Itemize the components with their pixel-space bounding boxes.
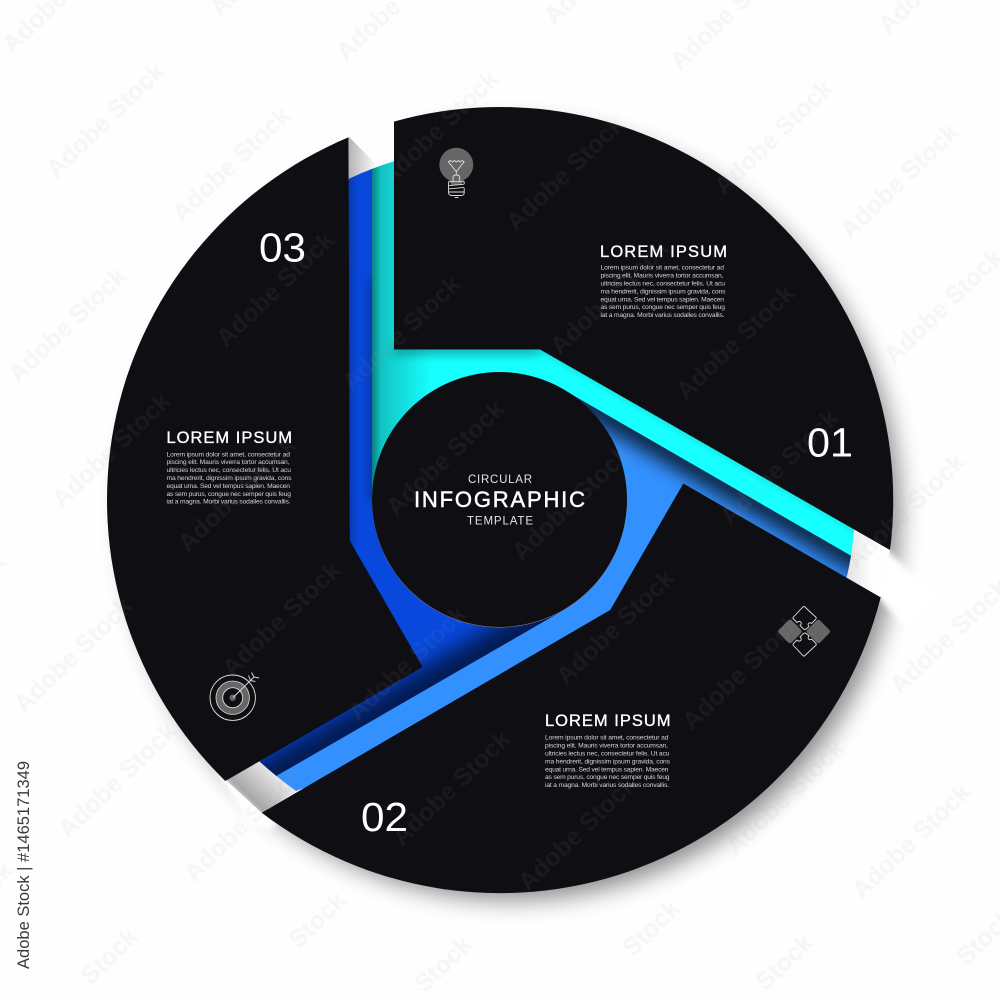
band: light blue layer 02 [276,392,851,791]
text block 02: piscing elit. Mauris viverra tortor accumsan, [545,743,668,750]
stock watermark lattice: Adobe Stock [53,717,182,843]
number 02: 02 [361,794,408,840]
stock watermark lattice: Adobe Stock [721,734,850,860]
number 01: 01 [807,420,853,466]
circle drop shadow [124,124,900,900]
stock watermark lattice: Adobe Stock [9,592,138,718]
stock watermark lattice: Adobe Stock [47,387,176,513]
stock watermark lattice: Adobe Stock [343,600,472,726]
top notch fold shading [349,137,378,179]
stock watermark lattice: Stock [617,894,686,962]
text block 01 [600,243,727,319]
band: cyan layer 01 [372,161,854,556]
text block 02: as sem purus, congue nec semper quis feug [545,774,670,781]
center circle [372,372,627,627]
icon: light bulb [439,148,473,198]
text block 03 [166,429,292,506]
text block 01: Lorem ipsum dolor sit amet, consectetur ad [600,265,724,272]
stock watermark lattice: Stock [750,928,819,996]
segment 02 black panel [262,484,881,893]
text block 02: Lorem ipsum dolor sit amet, consectetur ad [545,735,669,742]
stock watermark lattice: Adobe Stock [337,270,466,396]
text block 03: ultricies lectus nec, consectetur felis. Ut acu [166,467,291,474]
stock watermark lattice: Adobe Stock [179,761,308,887]
stock watermark lattice: Adobe Stock [841,448,970,574]
band: dark blue layer 03 [259,168,564,776]
stock watermark lattice: Adobe Stock [167,101,296,227]
stock watermark lattice: Adobe Stock [375,65,504,191]
stock watermark lattice: Adobe Stock [501,110,630,236]
right gap light strip [845,530,938,628]
text block 03: as sem purus, congue nec semper quis feug [166,491,291,498]
center title: CIRCULAR [468,474,532,486]
stock watermark lattice: Adobe Stock [513,770,642,896]
text block 01: LOREM IPSUM [600,243,727,261]
stock watermark lattice: Stock [409,930,478,998]
segment 03 black panel [107,137,423,781]
text block 03: ma hendrerit, dignissim ipsum gravida, cons [166,475,292,482]
text block 02: ma hendrerit, dignissim ipsum gravida, cons [545,758,671,765]
stock watermark lattice: Adobe Stock [387,725,516,851]
number 03: 03 [259,224,306,270]
text block 01: iat a magna. Morbi varius sodalles convallis. [600,312,725,319]
stock watermark lattice: Adobe Stock [545,234,674,360]
text block 03: piscing elit. Mauris viverra tortor accumsan, [166,459,290,466]
stock watermark lattice: Adobe Stock [173,431,302,557]
stock watermark lattice: Adobe Stock [41,57,170,183]
center title: TEMPLATE [467,516,533,528]
stock watermark lattice: Stock [283,886,352,954]
text block 02 [545,712,671,789]
text block 03: Lorem ipsum dolor sit amet, consectetur ad [166,451,290,458]
text block 01: ultricies lectus nec, consectetur felis. Ut acu [600,280,725,288]
vertical stock ID label: Adobe Stock | #1465171349 [15,761,33,969]
lower-left gap white mask [215,750,310,830]
text block 03: iat a magna. Morbi varius sodalles convallis. [166,499,291,506]
stock watermark lattice: Adobe Stock [381,395,510,521]
text block 02: iat a magna. Morbi varius sodalles convallis. [545,782,669,789]
segment 01 black panel [394,107,893,550]
text block 01: equat urna. Sed vel tempus sapien. Maecen [600,296,724,303]
stock watermark lattice: Stock [75,922,144,990]
icon: target with arrow [210,672,259,720]
stock watermark lattice: Adobe Stock [835,118,964,244]
text block 02: LOREM IPSUM [545,712,670,730]
stock watermark lattice: Adobe Stock [211,226,340,352]
text block 01: ma hendrerit, dignissim ipsum gravida, cons [600,288,726,295]
stock watermark lattice: Adobe Stock [671,279,800,405]
stock watermark lattice: Adobe Stock [677,609,806,735]
text block 02: ultricies lectus nec, consectetur felis. Ut acu [545,750,670,758]
top gap white mask [340,90,410,190]
center title [414,474,585,528]
stock watermark lattice: Adobe Stock [715,404,844,530]
center title: INFOGRAPHIC [414,487,585,512]
stock watermark lattice: Adobe Stock [507,440,636,566]
stock watermark lattice: Adobe Stock [847,778,976,904]
stock watermark lattice: Adobe Stock [3,262,132,388]
text block 02: equat urna. Sed vel tempus sapien. Maecen [545,766,669,773]
text block 01: piscing elit. Mauris viverra tortor accumsan, [600,273,724,280]
text block 03: equat urna. Sed vel tempus sapien. Maecen [166,483,290,490]
lower-left notch fold shading [225,761,297,813]
right notch fold shading [846,529,890,598]
text block 03: LOREM IPSUM [166,429,292,447]
stock watermark lattice: Adobe Stock [217,556,346,682]
text block 01: as sem purus, congue nec semper quis feug [600,304,725,311]
stock watermark lattice: Adobe Stock [709,74,838,200]
icon: puzzle pieces [777,606,831,656]
stock watermark lattice: Adobe Stock [551,564,680,690]
